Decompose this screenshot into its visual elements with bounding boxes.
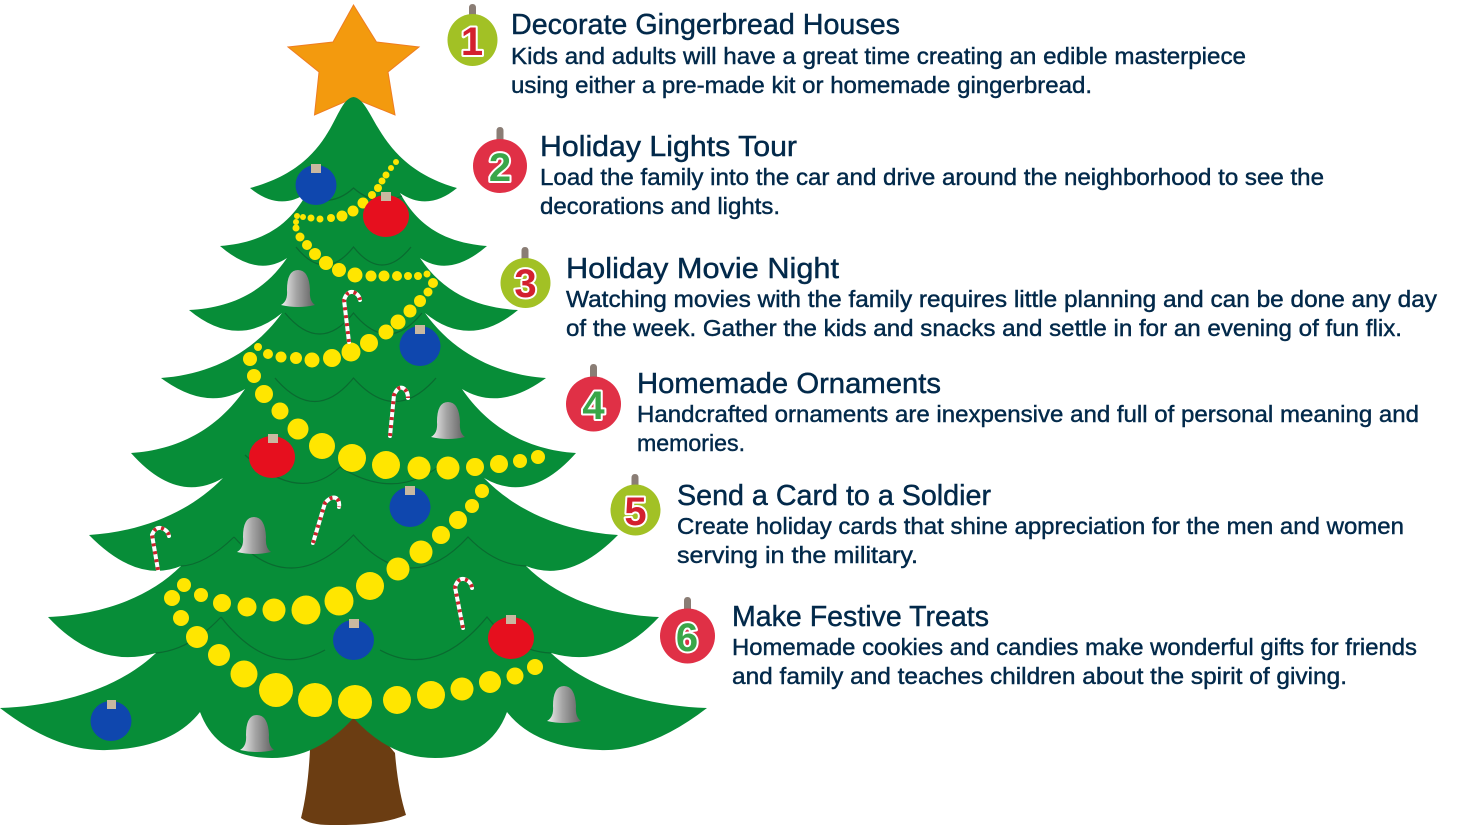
icon: ornament 3 (500, 247, 550, 308)
blue and red baubles (90, 164, 534, 741)
body text 4 (637, 401, 1419, 456)
body text 1 (511, 43, 1246, 98)
heading 3: Holiday Movie Night (566, 253, 839, 285)
body text 6: and family and teaches children about the spirit of giving. (732, 663, 1347, 689)
icon: ornament 6 (660, 597, 715, 664)
body text 4: Handcrafted ornaments are inexpensive and full of personal meaning and (637, 401, 1419, 427)
body text 3 (566, 286, 1437, 341)
body text 1: using either a pre-made kit or homemade gingerbread. (511, 72, 1092, 98)
icon: ornament 5 (610, 474, 660, 536)
body text 2: Load the family into the car and drive around the neighborhood to see the (540, 164, 1324, 190)
garland lower (164, 484, 543, 719)
heading 2: Holiday Lights Tour (540, 131, 797, 163)
item 5: card to a soldier (610, 474, 1404, 568)
candy canes (152, 292, 472, 628)
body text 3: of the week. Gather the kids and snacks and settle in for an evening of fun flix. (566, 315, 1402, 341)
body text 2 (540, 164, 1324, 219)
christmas tree (0, 5, 707, 825)
icon: ornament 4 (566, 364, 621, 432)
icon: ornament 4: 4 (582, 384, 605, 428)
icon: ornament 1: 1 (461, 20, 483, 64)
garland upper (243, 159, 545, 480)
body text 4: memories. (637, 430, 745, 456)
body text 1: Kids and adults will have a great time creating an edible masterpiece (511, 43, 1246, 69)
heading 1: Decorate Gingerbread Houses (511, 9, 900, 41)
tree foliage (0, 97, 707, 758)
icon: ornament 6: 6 (676, 616, 698, 660)
body text 3: Watching movies with the family requires little planning and can be done any day (566, 286, 1437, 312)
body text 5: serving in the military. (677, 542, 918, 568)
item 4: homemade ornaments (566, 364, 1419, 456)
heading 5: Send a Card to a Soldier (677, 480, 991, 512)
item 6: festive treats (660, 597, 1417, 689)
item 1: gingerbread houses (448, 4, 1246, 98)
body text 2: decorations and lights. (540, 193, 780, 219)
icon: ornament 5: 5 (624, 490, 647, 534)
star topper (288, 5, 419, 115)
body text 6: Homemade cookies and candies make wonderful gifts for friends (732, 634, 1417, 660)
icon: ornament 3: 3 (514, 262, 537, 306)
body text 5: Create holiday cards that shine appreciation for the men and women (677, 513, 1404, 539)
icon: ornament 1 (448, 4, 498, 66)
icon: ornament 2 (473, 127, 527, 193)
item 3: holiday movie night (500, 247, 1437, 341)
silver bells (237, 270, 581, 752)
icon: ornament 2: 2 (489, 146, 511, 190)
trunk (301, 716, 406, 825)
foliage scallop lines (156, 188, 551, 660)
body text 5 (677, 513, 1404, 568)
heading 4: Homemade Ornaments (637, 368, 941, 400)
item 2: holiday lights tour (473, 127, 1324, 219)
body text 6 (732, 634, 1417, 689)
heading 6: Make Festive Treats (732, 601, 989, 633)
